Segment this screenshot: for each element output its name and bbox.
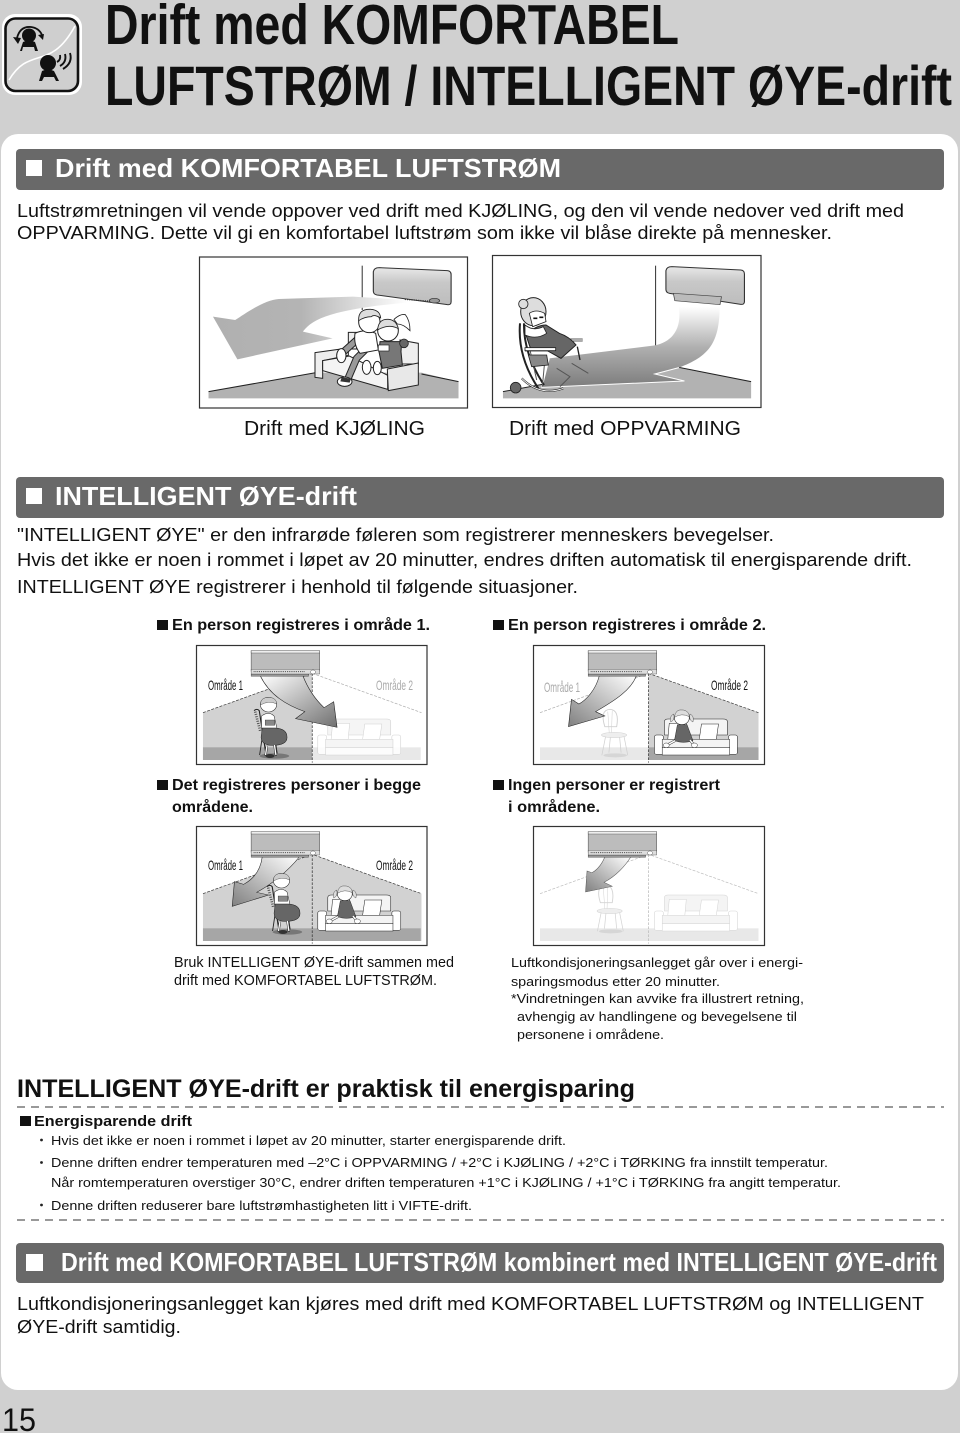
scenario heading: both areas: områdene.: [172, 799, 253, 816]
note: energy saving mode: sparingsmodus etter 20 minutter.: [511, 974, 720, 989]
note: energy saving mode: [511, 955, 804, 1042]
caption: heating: Drift med OPPVARMING: [509, 417, 741, 440]
diagram: person in area 2: [534, 646, 764, 764]
heading: energy saving: INTELLIGENT ØYE-drift er praktisk til energisparing: [17, 1075, 635, 1103]
diagram: person in area 1: Område 2: [376, 677, 413, 693]
grandmother in rocking chair: [510, 298, 588, 393]
heading bar: INTELLIGENT ØYE-drift: [16, 477, 944, 518]
text block: combined operation: Luftkondisjoneringsanlegget kan kjøres med drift med KOMFORTABEL LUFTSTRØM og INTELLIGENT: [17, 1293, 924, 1314]
energy saving details: Når romtemperaturen overstiger 30°C, endrer driften temperaturen +1°C i KJØLING / +1°C i TØRKING fra angitt temperatur.: [51, 1176, 841, 1190]
scenario heading: area 2: En person registreres i område 2.: [508, 617, 766, 634]
text block: airflow intro: [17, 200, 904, 243]
note: energy saving mode: avhengig av handlingene og bevegelsene til: [517, 1009, 797, 1024]
energy saving details: Energisparende drift: [34, 1113, 192, 1130]
title: [105, 0, 952, 117]
text block: intelligent eye description: INTELLIGENT ØYE registrerer i henhold til følgende situasjoner.: [17, 576, 578, 597]
note: combined use: drift med KOMFORTABEL LUFTSTRØM.: [174, 973, 437, 989]
energy saving details: [20, 1113, 841, 1213]
heading bar: Drift med KOMFORTABEL LUFTSTRØM: Drift med KOMFORTABEL LUFTSTRØM: [55, 153, 561, 183]
scenario heading: both areas: Det registreres personer i begge: [172, 777, 421, 794]
note: energy saving mode: Luftkondisjoneringsanlegget går over i energi-: [511, 955, 803, 970]
note: combined use: Bruk INTELLIGENT ØYE-drift sammen med: [174, 955, 454, 971]
icon: comfort airflow and intelligent eye: [2, 14, 82, 95]
text block: intelligent eye description: [17, 524, 912, 597]
scenario heading: no persons: i områdene.: [508, 799, 600, 816]
diagram: persons in both areas: Område 2: [376, 857, 413, 873]
energy saving details: Denne driften endrer temperaturen med –2°C i OPPVARMING / +2°C i KJØLING / +2°C i TØRKING fra innstilt temperatur.: [51, 1156, 828, 1170]
illustration: heating airflow: [492, 256, 761, 408]
text block: combined operation: ØYE-drift samtidig.: [17, 1316, 181, 1337]
energy saving details: Hvis det ikke er noen i rommet i løpet av 20 minutter, starter energisparende drift.: [51, 1134, 566, 1148]
text block: intelligent eye description: "INTELLIGENT ØYE" er den infrarøde føleren som registrerer menneskers bevegelser.: [17, 524, 774, 545]
diagram: persons in both areas: [196, 826, 427, 946]
diagram: no persons detected: [534, 826, 764, 946]
note: energy saving mode: *Vindretningen kan avvike fra illustrert retning,: [511, 991, 804, 1006]
scenario heading: area 1: En person registreres i område 1.: [172, 617, 430, 634]
heading bar: Drift med KOMFORTABEL LUFTSTRØM: [16, 149, 944, 190]
text block: combined operation: [17, 1293, 924, 1337]
diagram: persons in both areas: Område 1: [208, 857, 243, 873]
caption: cooling: Drift med KJØLING: [244, 417, 425, 440]
diagram: person in area 1: [196, 646, 427, 764]
text block: airflow intro: OPPVARMING. Dette vil gi en komfortabel luftstrøm som ikke vil blåse direkte på mennesker.: [17, 222, 832, 243]
text block: intelligent eye description: Hvis det ikke er noen i rommet i løpet av 20 minutter, endres driften automatisk til energisparende drift.: [17, 549, 912, 570]
illustration: cooling airflow: [200, 257, 468, 408]
diagram: person in area 1: Område 1: [208, 677, 243, 693]
energy saving details: Denne driften reduserer bare luftstrømhastigheten litt i VIFTE-drift.: [51, 1199, 472, 1213]
children on sofa: [315, 309, 418, 391]
text block: airflow intro: Luftstrømretningen vil vende oppover ved drift med KJØLING, og den vil vende nedover ved drift med: [17, 200, 904, 221]
note: combined use: [174, 955, 454, 989]
heading bar: INTELLIGENT ØYE-drift: INTELLIGENT ØYE-drift: [55, 481, 357, 511]
scenario heading: no persons: Ingen personer er registrert: [508, 777, 720, 794]
diagram: person in area 2: Område 2: [711, 677, 748, 693]
scenario heading: both areas: [157, 777, 421, 816]
diagram: person in area 2: Område 1: [544, 679, 580, 695]
scenario heading: no persons: [493, 777, 720, 816]
note: energy saving mode: personene i områdene.: [517, 1027, 664, 1042]
